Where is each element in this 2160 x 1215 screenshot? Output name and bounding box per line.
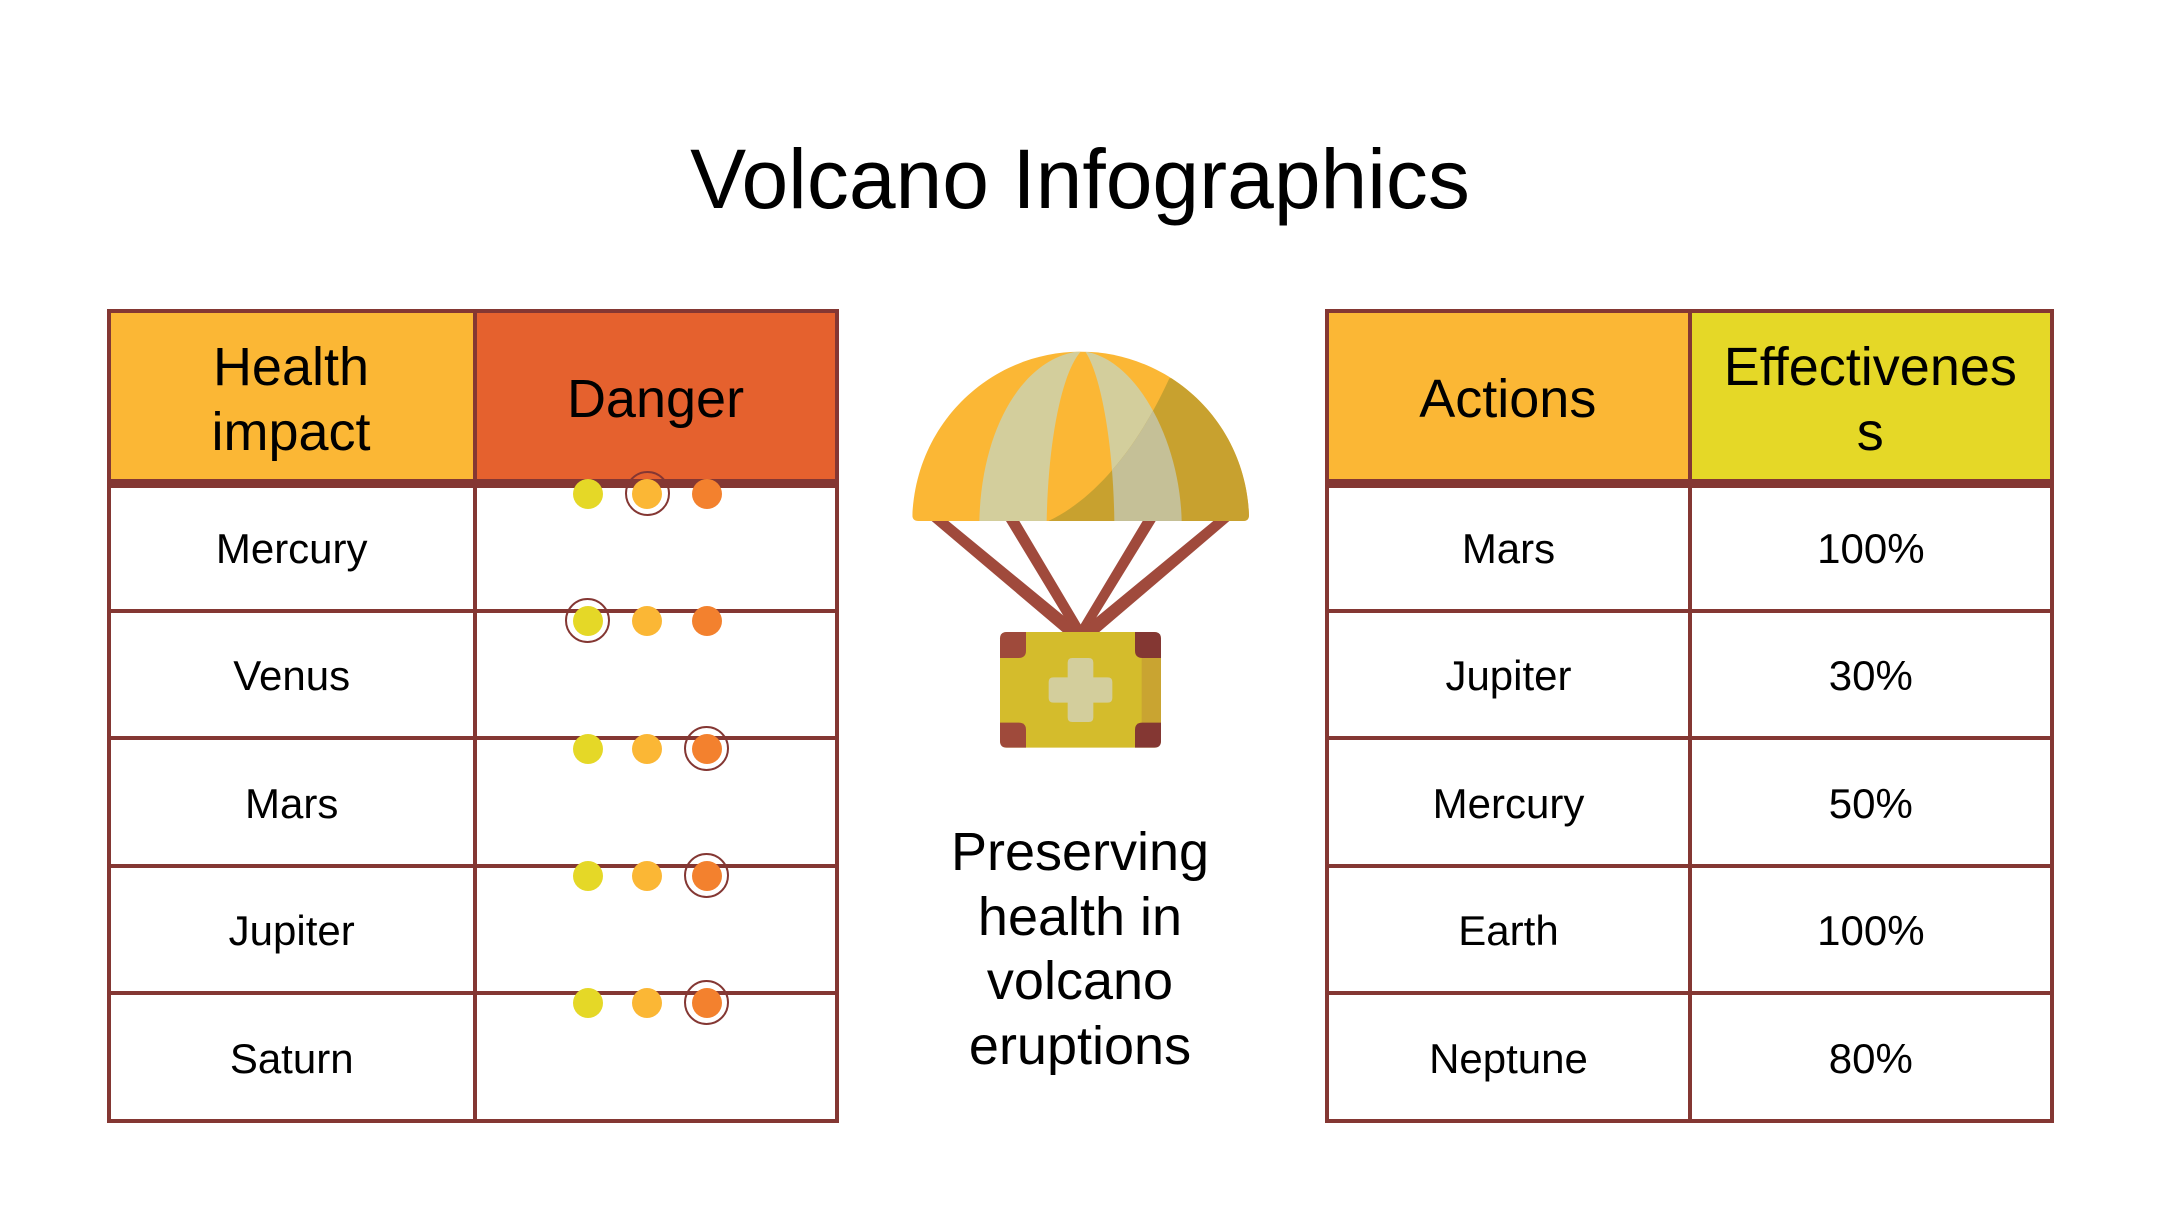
row label: Venus: Venus — [233, 652, 350, 699]
header cell: effectiveness: s — [1857, 402, 1884, 462]
row label: Mercury: Mercury — [1433, 780, 1584, 827]
parachute canopy — [910, 350, 1252, 523]
header cell: effectiveness — [1689, 313, 2051, 487]
parachute straps — [932, 521, 1229, 632]
header cell: danger — [474, 313, 837, 485]
header cell: actions: Actions — [1419, 368, 1596, 428]
value: Neptune 80%: 80% — [1829, 1035, 1913, 1082]
header cell: health impact: Health — [213, 337, 369, 397]
header cell: health impact — [109, 313, 473, 487]
center caption: Preserving — [951, 822, 1209, 882]
panel: actions and effectiveness table — [1325, 309, 2054, 1123]
header cell: danger: Danger — [567, 368, 744, 428]
row label: Neptune: Neptune — [1429, 1035, 1588, 1082]
value: Mercury 50%: 50% — [1829, 780, 1913, 827]
row label: Earth: Earth — [1458, 907, 1559, 954]
first aid case — [1000, 632, 1161, 748]
center caption — [951, 822, 1209, 1076]
header cell: actions — [1327, 313, 1688, 485]
danger rating: Venus, low — [565, 598, 722, 643]
row label: Jupiter: Jupiter — [229, 907, 355, 954]
header cell: health impact: impact — [211, 402, 371, 462]
danger rating: Saturn, high — [573, 980, 729, 1025]
center caption: volcano — [987, 951, 1173, 1011]
panel: health impact and danger table — [107, 309, 839, 1123]
row label: Mars: Mars — [245, 780, 338, 827]
danger rating: Mars, high — [573, 726, 729, 771]
value: Jupiter 30%: 30% — [1829, 652, 1913, 699]
title: Volcano Infographics — [690, 132, 1470, 226]
row label: Mercury: Mercury — [216, 525, 368, 572]
center caption: health in — [978, 887, 1182, 947]
row label: Mars: Mars — [1462, 525, 1555, 572]
row label: Saturn: Saturn — [230, 1035, 354, 1082]
medical cross — [1049, 658, 1112, 722]
icon: parachute with first aid case — [912, 352, 1249, 748]
value: Mars 100%: 100% — [1817, 525, 1925, 572]
row label: Jupiter: Jupiter — [1445, 652, 1572, 699]
header cell: effectiveness: Effectivenes — [1724, 337, 2017, 397]
value: Earth 100%: 100% — [1817, 907, 1925, 954]
danger rating: Mercury, medium — [573, 471, 722, 516]
center caption: eruptions — [969, 1016, 1191, 1076]
danger rating: Jupiter, high — [573, 853, 729, 898]
